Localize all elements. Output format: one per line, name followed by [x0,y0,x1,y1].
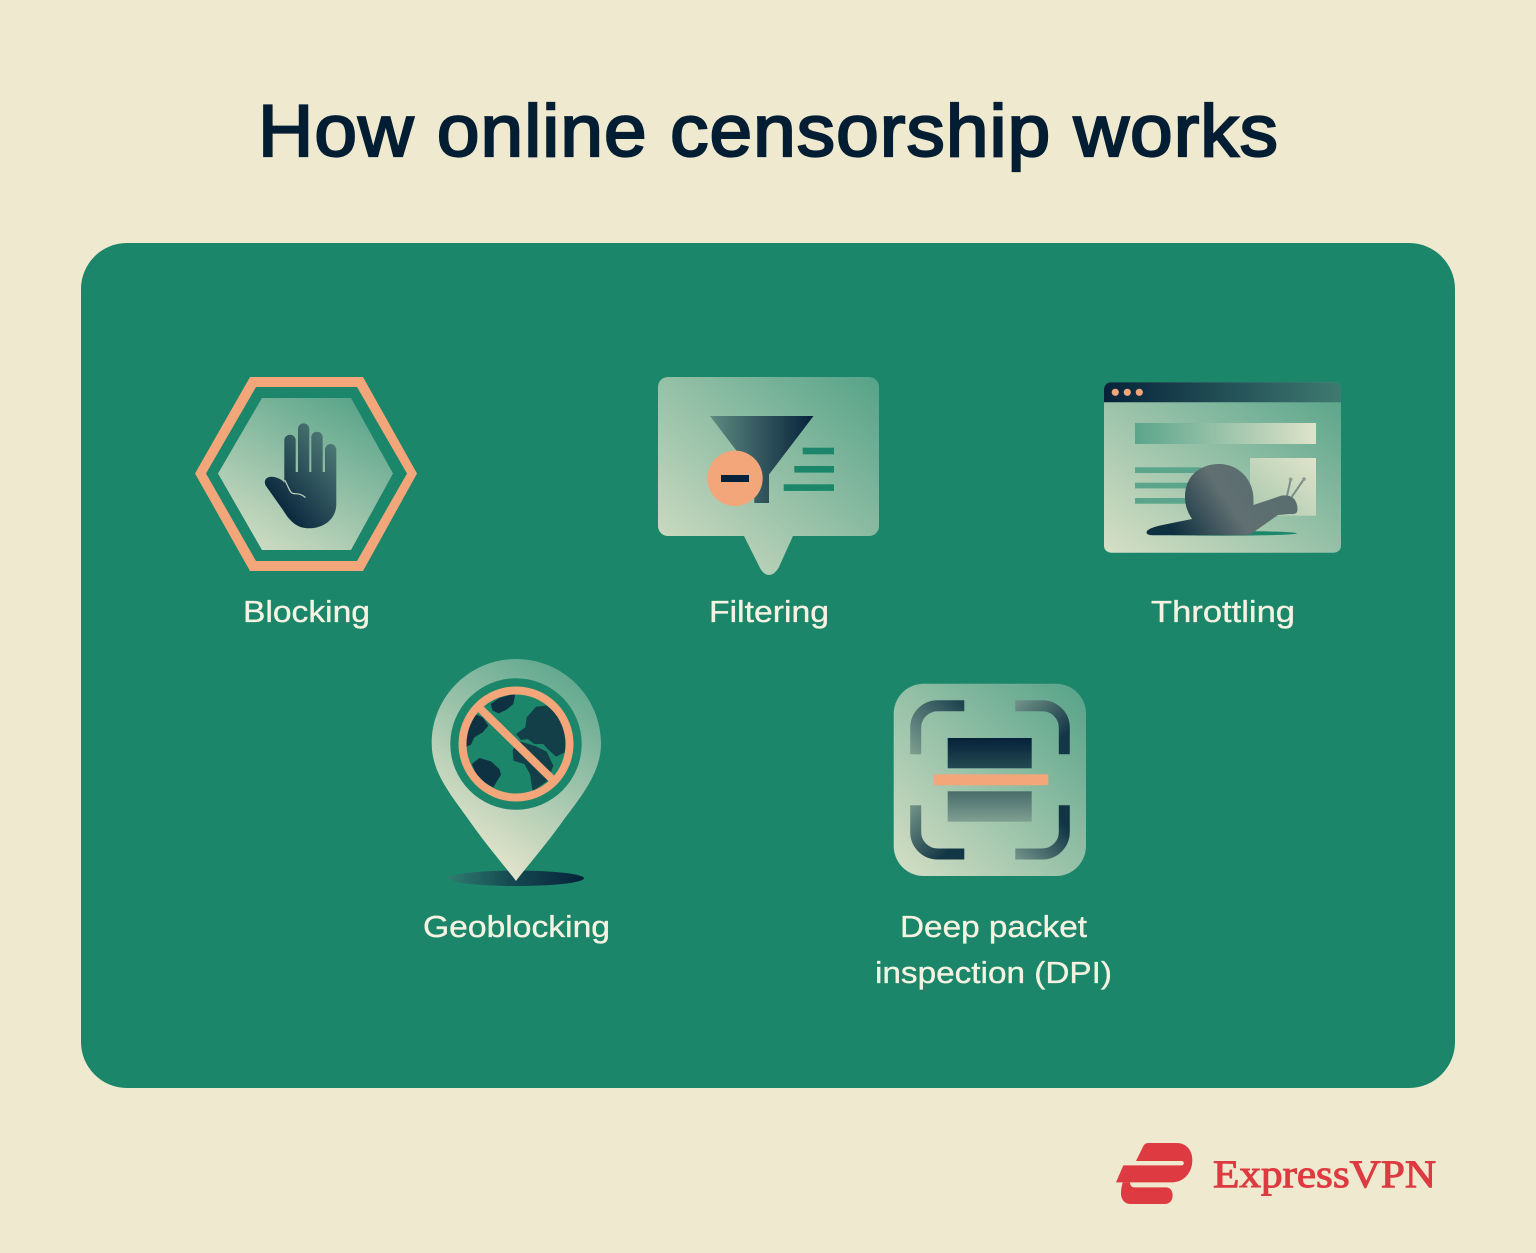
label: Deep packet inspection (DPI) [875,909,1112,990]
label: Deep packet inspection (DPI): inspection (DPI) [875,955,1112,990]
logo: ExpressVPN [1116,1143,1436,1204]
label: Throttling: Throttling [1151,594,1295,629]
title: How online censorship works [258,90,1278,172]
logo: ExpressVPN: ExpressVPN [1213,1153,1436,1196]
label: Geoblocking: Geoblocking [423,909,610,944]
label: Deep packet inspection (DPI): Deep packet [900,909,1087,944]
icon: deep packet inspection scanner [894,684,1086,876]
icon: geoblocking map pin with crossed-out globe [432,659,601,886]
label: Blocking: Blocking [243,594,370,629]
icon: throttling browser window with snail [1104,382,1341,553]
icon: blocking hexagon with hand [195,377,417,571]
icon: filtering speech bubble with funnel [658,377,879,575]
label: Filtering: Filtering [709,594,829,629]
panel: censorship methods [81,243,1455,1088]
